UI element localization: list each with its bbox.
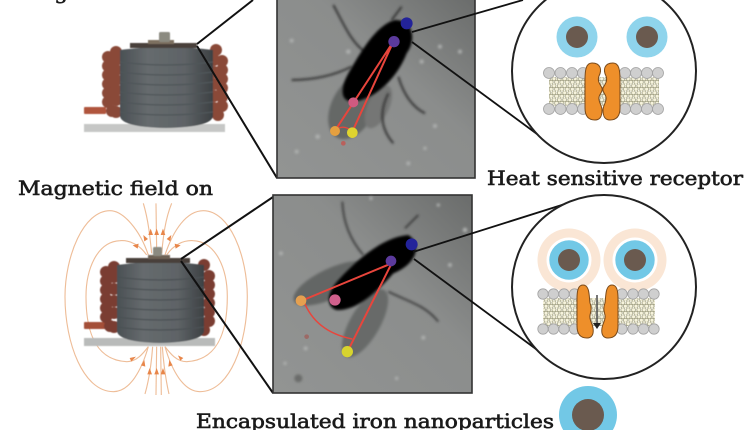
open channel protein	[577, 285, 618, 338]
fly body and wings, closed	[290, 5, 462, 165]
magnetic field lines	[65, 203, 247, 395]
photo: fly with wings open	[273, 195, 472, 393]
electromagnet coil, field on	[84, 247, 215, 346]
heated nanoparticle right	[604, 228, 666, 292]
photo: fly with wings closed	[277, 0, 475, 178]
circle: receptor open	[512, 195, 696, 379]
arrow: ion flow through channel	[593, 295, 601, 329]
nanoparticle left	[556, 16, 598, 58]
icon: encapsulated nanoparticle legend	[559, 386, 617, 430]
zoom lines from bottom fly to bottom circle	[413, 204, 565, 352]
zoom lines from top fly to top circle	[412, 0, 537, 134]
fly body and wings, open	[279, 197, 467, 382]
label: heat sensitive receptor: Heat sensitive receptor	[487, 167, 744, 190]
tracking markers and wing angle	[296, 238, 418, 357]
title: field on heading: Magnetic field on	[18, 177, 213, 200]
closed channel protein	[585, 63, 620, 120]
zoom lines from coil to bottom photo	[181, 197, 273, 393]
heated nanoparticle left	[538, 228, 600, 292]
lipid membrane	[544, 68, 664, 114]
circle: receptor closed	[512, 0, 696, 163]
nanoparticle right	[626, 16, 668, 58]
zoom lines from coil to top photo	[197, 0, 277, 178]
electromagnet coil, field off	[84, 32, 228, 132]
lipid membrane	[538, 289, 659, 334]
tracking markers and angle lines	[330, 17, 413, 146]
